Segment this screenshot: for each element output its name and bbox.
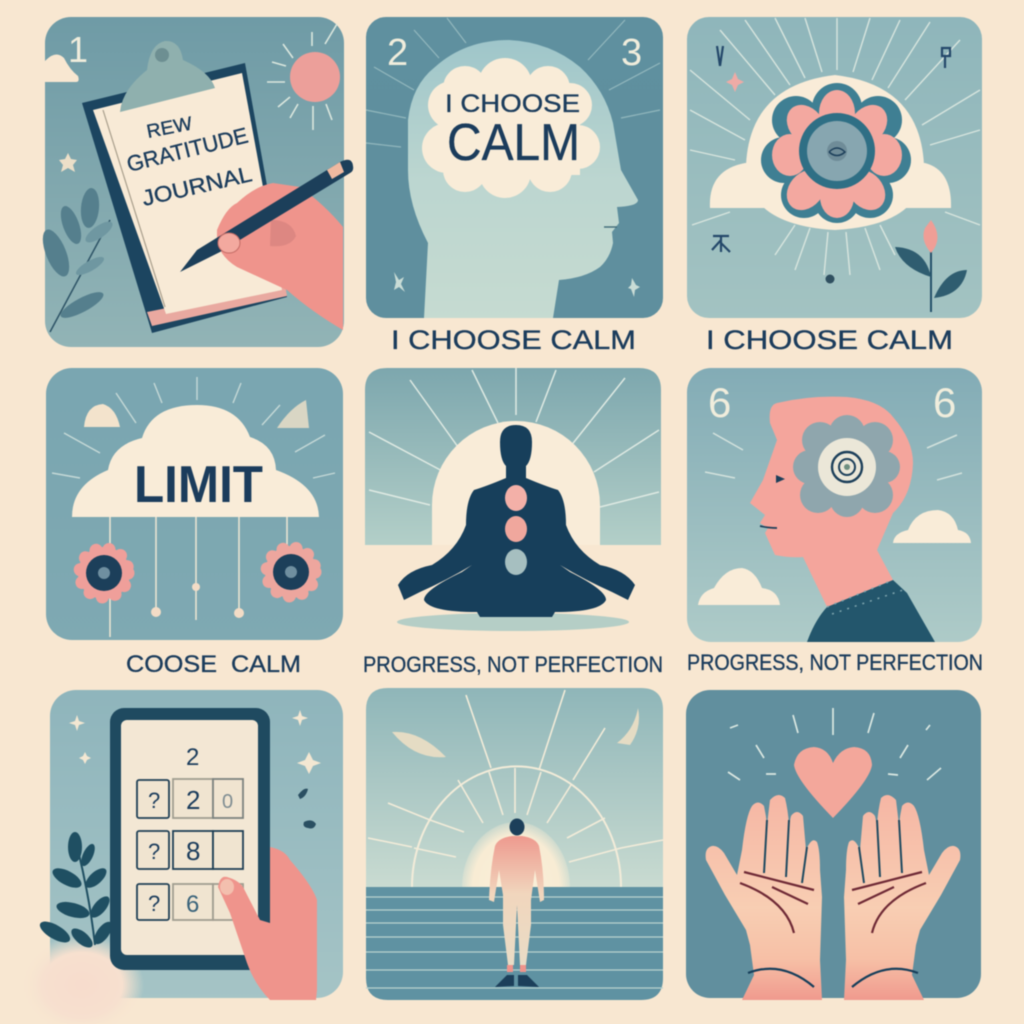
hanging strings [110,517,287,637]
journal book [82,41,287,333]
clouds [893,510,971,543]
panel 7: phone [20,690,343,1024]
sparkles [69,710,321,774]
closed eye [776,475,785,483]
beige fade blob [20,935,144,1024]
flower right [265,546,317,598]
panel 4: limit cloud [46,368,343,640]
head silhouette [408,40,638,318]
rays [52,377,335,478]
icon: small dark glyphs [712,46,950,252]
caption: PROGRESS, NOT PERFECTION [363,652,663,677]
icon: plant [37,187,116,332]
phone: 0 [222,791,233,813]
phone: ? [148,788,160,813]
phone: 2 [186,744,199,771]
small sparkles [394,272,640,297]
journal title [124,114,254,211]
cloud with limit: LIMIT [134,456,263,514]
phone: 2 [186,785,200,815]
arc rays [368,690,663,887]
rays [369,368,659,507]
flower in head [793,415,900,517]
rays [728,708,941,780]
icon: pink sun [267,24,340,130]
panel 1: gratitude journal [34,17,353,347]
mouth [760,526,777,528]
calm thought cloud: I CHOOSE [445,90,580,118]
panel 9: hands and heart [686,690,981,1000]
birds [392,732,446,757]
icon: tulip [895,220,967,312]
calm thought cloud [422,58,600,198]
caption: I CHOOSE CALM [706,325,953,355]
icon: small cloud [34,54,79,82]
panel 6: head profile [687,368,982,642]
numbers: 6 [708,379,731,426]
ground shadow [397,613,629,631]
sun glow [432,421,600,545]
panel 2: I choose calm head [366,17,663,318]
journal title: JOURNAL [140,161,254,211]
dashes [705,433,962,480]
caption: I CHOOSE CALM [391,325,636,355]
sun [462,822,570,952]
cloud with limit [72,405,319,517]
plant [37,832,115,951]
rays [366,18,660,147]
step numbers: 2 [387,32,408,74]
icon: star [59,153,77,172]
panel 6: head profile: 6 [933,379,956,426]
small clouds [84,404,120,427]
panel 3: flower sunburst [687,17,982,318]
right hand [844,795,960,1000]
phone [110,708,270,970]
flower [761,83,911,223]
step number 1: 1 [68,29,88,70]
sea [366,887,663,1000]
hand [218,840,317,1000]
meditating figure [398,425,635,617]
sweater [807,580,935,642]
calm thought cloud: CALM [447,114,580,172]
phone: 6 [186,891,199,918]
man [489,818,544,987]
heart [794,747,872,818]
phone: 8 [186,836,200,866]
caption: COOSE CALM [126,651,301,678]
caption: PROGRESS, NOT PERFECTION [687,650,983,675]
panel 5: meditation [365,368,661,631]
left hand [706,795,822,1000]
sun rays [690,18,980,275]
flower left [78,547,130,599]
phone: ? [148,891,160,916]
panel 2: I choose calm head: 3 [621,32,642,74]
hand with pen [180,160,353,330]
clipboard clip [120,41,215,112]
phone: ? [148,839,160,864]
icon: pink sparkle [726,72,744,92]
panel 8: man at horizon [366,688,663,1000]
head [750,397,913,607]
chakra dots [505,485,527,511]
journal title: REW [145,114,194,143]
cloud with flower [710,75,951,230]
keypad [137,779,243,920]
journal title: GRATITUDE [124,123,251,177]
mouth [604,226,617,228]
